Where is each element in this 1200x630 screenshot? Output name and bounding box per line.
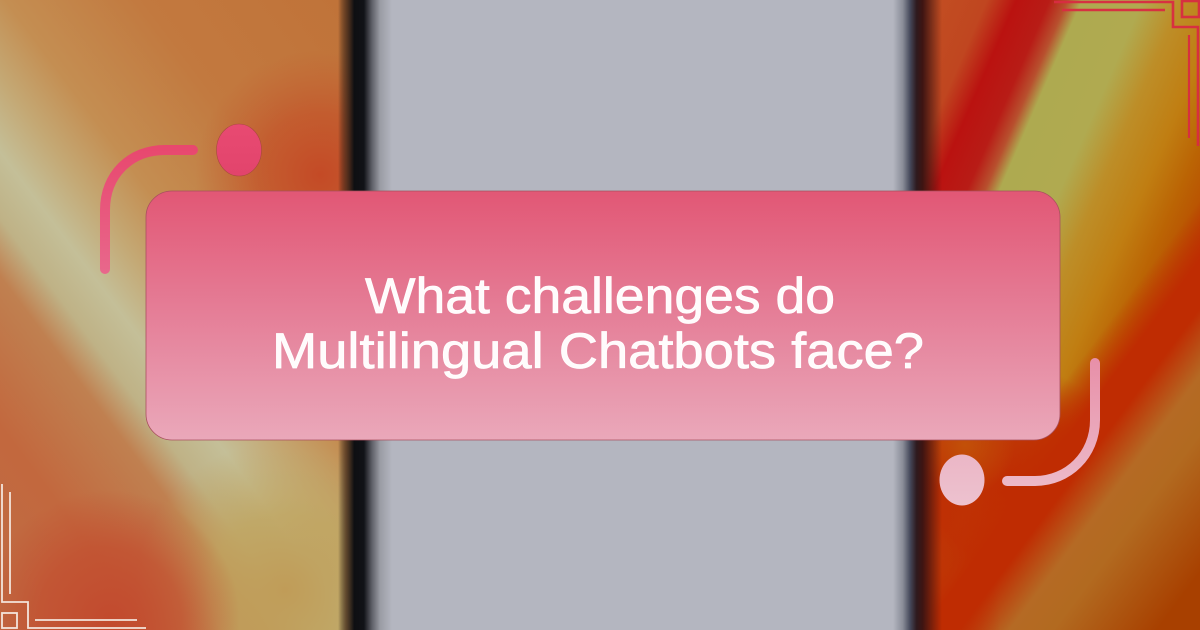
decorative dot: bottom right	[940, 454, 984, 506]
background: dark phone bezels	[338, 0, 942, 630]
title card	[146, 191, 1060, 440]
title text: Multilingual Chatbots face?	[272, 323, 924, 379]
decorative arc: top left	[105, 150, 193, 269]
decorative dot: top left	[216, 124, 262, 176]
title text: What challenges do	[365, 268, 835, 324]
background: left blurred panel	[0, 0, 360, 630]
corner ornament: top right	[1054, 1, 1199, 146]
corner ornament: bottom left	[2, 484, 146, 628]
decorative arc: bottom right	[1007, 363, 1095, 481]
background: right blurred panel	[900, 0, 1200, 630]
